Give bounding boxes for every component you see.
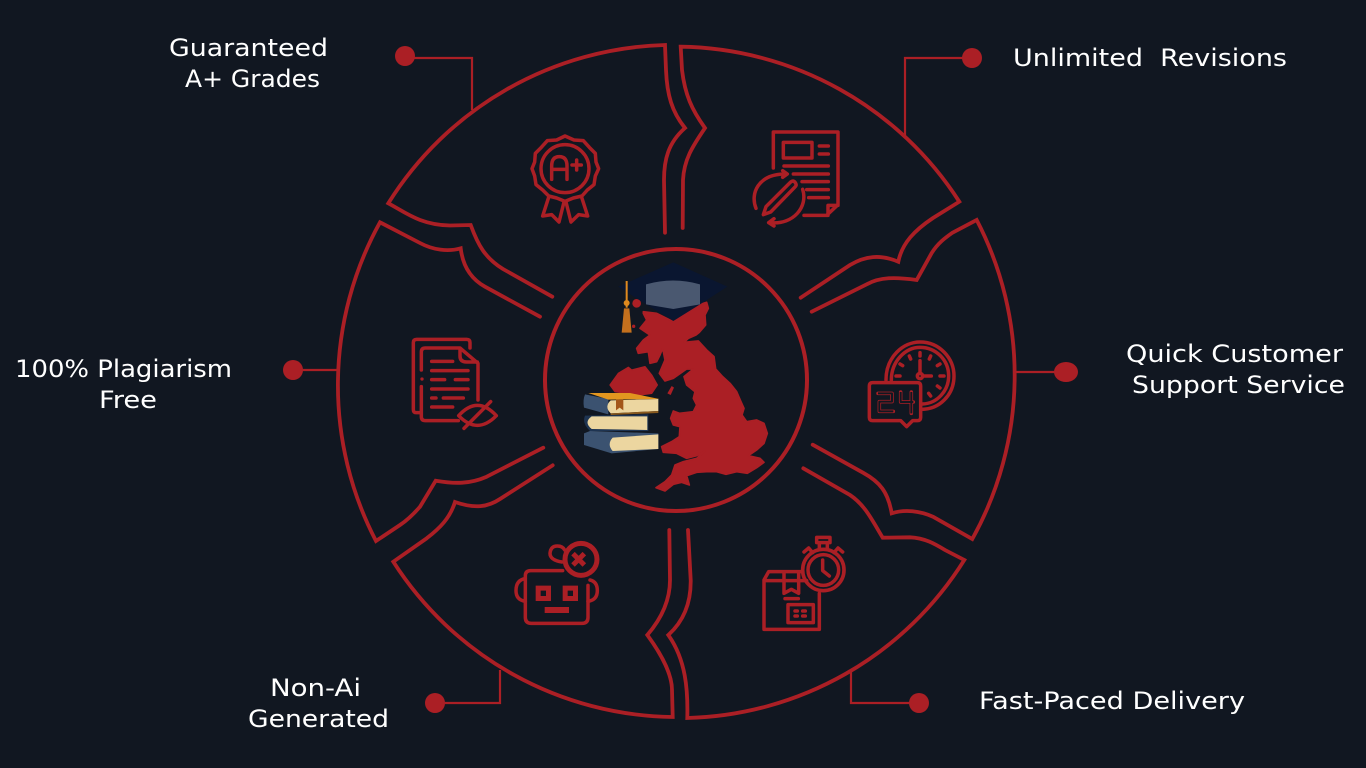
segment: bottom left (393, 465, 673, 717)
label: 100% Plagiarism Free: 100% Plagiarism (15, 355, 232, 383)
segment: top right (681, 47, 959, 298)
label: Quick Customer Support Service: Quick Customer (1126, 340, 1343, 368)
segment: bottom right (668, 468, 964, 718)
segment: right (812, 220, 1015, 539)
label: Guaranteed A+ Grades: Guaranteed (169, 34, 328, 62)
label: Guaranteed A+ Grades (169, 34, 328, 93)
label: 100% Plagiarism Free (15, 355, 232, 414)
connector: Fast-Paced Delivery (851, 672, 929, 713)
center emblem (545, 249, 807, 511)
connector: Unlimited Revisions (905, 48, 982, 138)
icon: 24 hour clock support (869, 342, 954, 427)
UK map (610, 299, 767, 491)
connector: Non-Ai Generated (425, 670, 500, 713)
connector: Quick Customer Support Service (1015, 362, 1078, 382)
label: Quick Customer Support Service: Support Service (1132, 371, 1345, 399)
label: Non-Ai Generated: Non-Ai (270, 674, 361, 702)
connector: 100% Plagiarism Free (283, 360, 338, 380)
label: Guaranteed A+ Grades: A+ Grades (185, 65, 320, 93)
label: Non-Ai Generated (248, 674, 389, 733)
label: Quick Customer Support Service (1126, 340, 1345, 399)
label: Fast-Paced Delivery: Fast-Paced Delivery (979, 687, 1245, 715)
stack of books (584, 393, 659, 453)
graduation cap (618, 262, 727, 333)
icon: parcel with stopwatch (764, 537, 844, 629)
center circle (545, 249, 807, 511)
segment: top left (388, 45, 685, 297)
connector: Guaranteed A+ Grades (395, 46, 472, 110)
icon: A+ rosette (532, 136, 599, 222)
label: 100% Plagiarism Free: Free (99, 386, 157, 414)
icon: document with crossed-out eye (413, 339, 496, 428)
label: Unlimited Revisions: Unlimited Revisions (1013, 44, 1287, 72)
label: Non-Ai Generated: Generated (248, 705, 389, 733)
icon: document revision (754, 132, 838, 226)
icon: robot with cross (516, 543, 597, 623)
segment: left (338, 222, 543, 541)
